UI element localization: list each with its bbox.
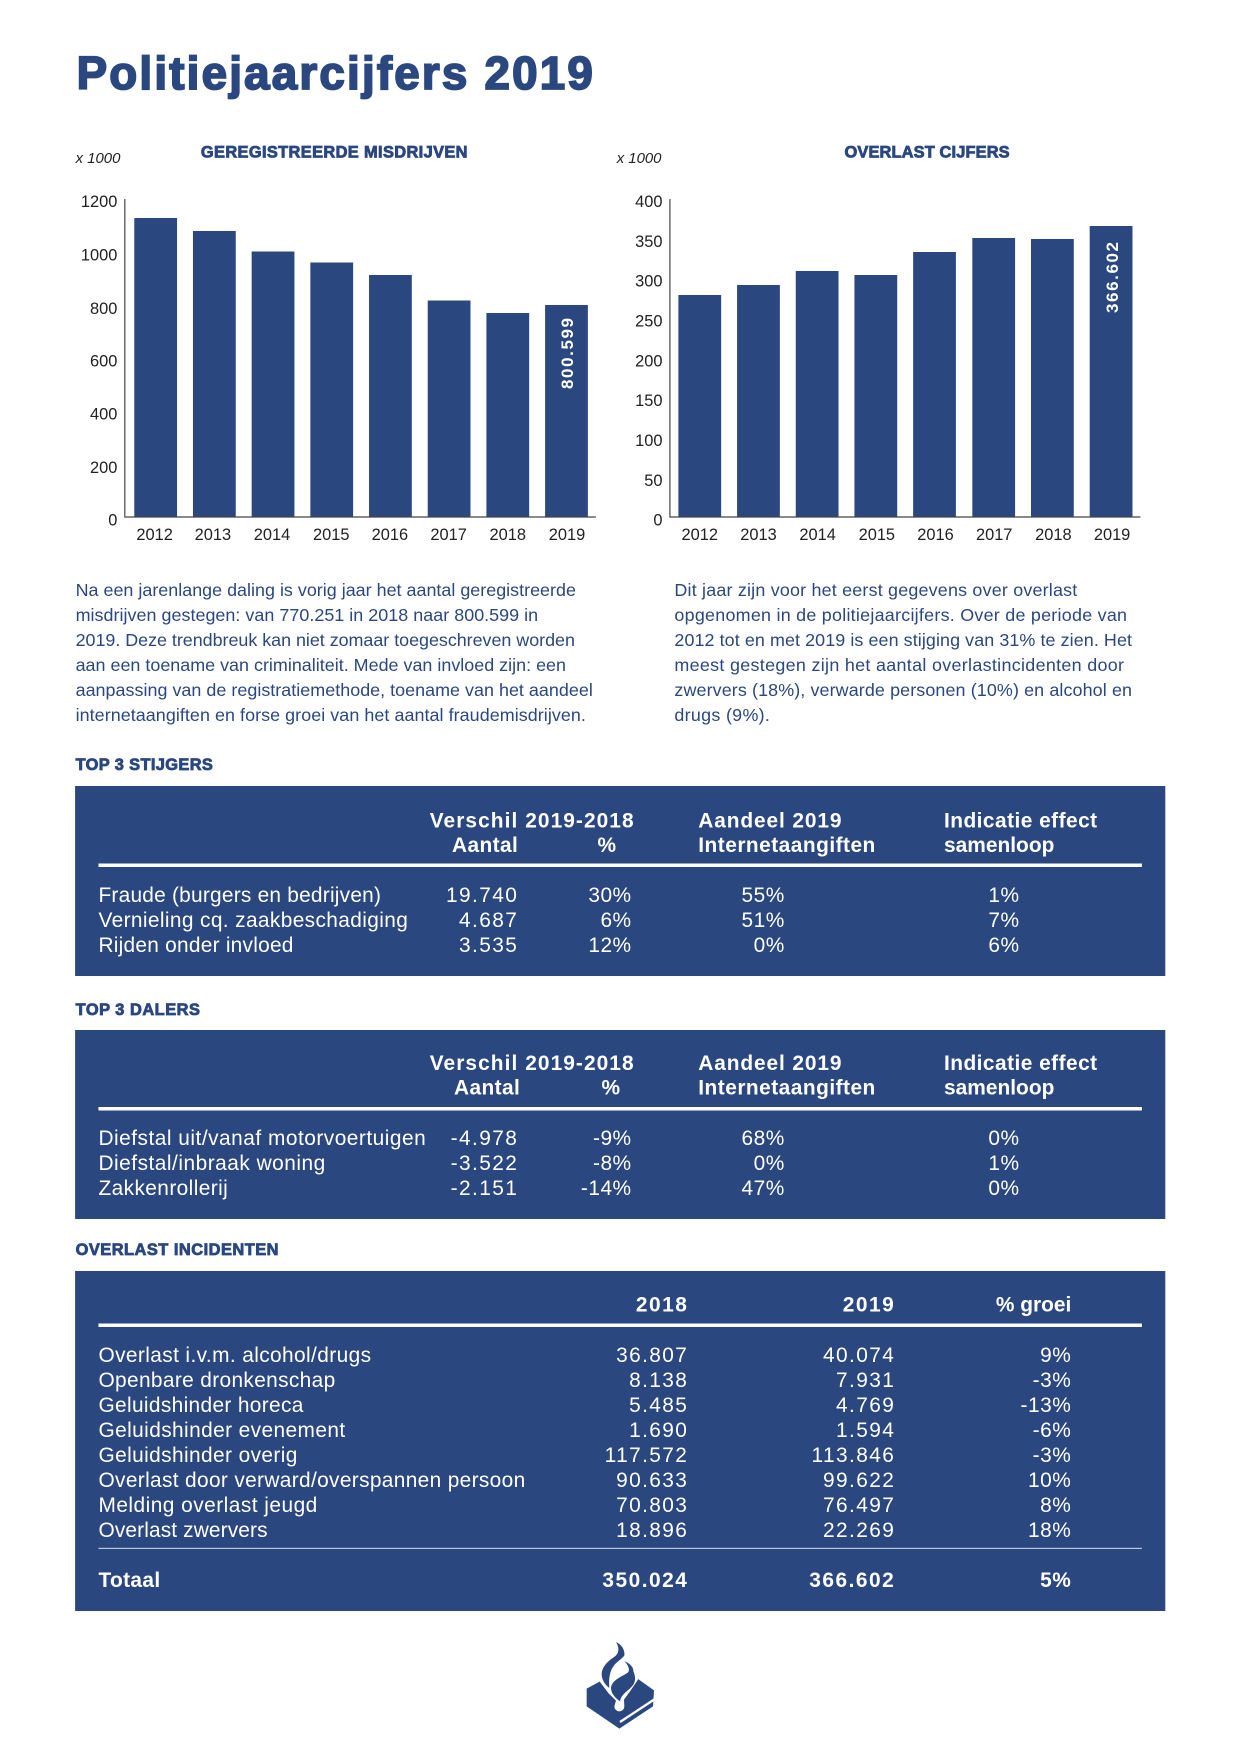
x axis labels: 2014 [254,526,290,544]
row: fraude [98,884,1020,907]
row: fraude: 30% [588,884,632,907]
y axis labels: 0 [653,511,662,530]
column headers: Indicatie effect [944,1052,1097,1075]
panel: top 3 stijgers [75,786,1165,976]
bars [134,218,588,517]
text block: overlast: Dit jaar zijn voor het eerst gegevens over overlast [674,580,1077,600]
column headers: Aantal [452,834,518,857]
row: zakkenrollerij [98,1177,1020,1200]
value label 2019: 800.599 [558,318,577,389]
axis lines [125,199,596,517]
row: overlast jeugd: 76.497 [823,1494,895,1517]
row: diefstal motorvoertuigen: 68% [742,1127,785,1150]
text block: misdrijven [76,580,593,725]
x axis labels: 2018 [1035,526,1072,544]
row: zakkenrollerij: 0% [988,1177,1020,1200]
row: vernieling [98,909,1020,932]
column headers: Aantal [454,1076,520,1100]
row: vernieling: 51% [742,909,785,932]
row: inbraak woning: -3.522 [451,1152,518,1175]
text block: overlast: zwervers (18%), verwarde personen (10%) en alcohol en [674,680,1132,700]
y axis labels [635,193,662,530]
row: geluidshinder horeca: 5.485 [629,1394,688,1417]
row: diefstal motorvoertuigen: -9% [593,1127,632,1150]
y axis labels: 1200 [81,193,117,211]
row: geluidshinder overig: Geluidshinder overig [98,1444,297,1467]
row: verward persoon: Overlast door verward/overspannen persoon [98,1469,525,1492]
column headers: 2019 [843,1293,895,1317]
column headers: Internetaangiften [698,834,875,857]
row: diefstal motorvoertuigen [98,1127,1020,1150]
row: geluidshinder overig [98,1444,1071,1467]
bars [678,226,1132,517]
row: overlast zwervers: 22.269 [823,1519,895,1542]
column headers: Aandeel 2019 [698,809,842,833]
row: openbare dronkenschap: 7.931 [836,1369,895,1392]
column headers: % [597,834,616,857]
row: fraude: 19.740 [446,884,518,907]
row: diefstal motorvoertuigen: -4.978 [451,1127,518,1150]
row: totaal: 366.602 [809,1569,895,1592]
column headers: % groei [996,1293,1071,1317]
heading: overlast incidenten: OVERLAST INCIDENTEN [76,1241,279,1259]
chart heading: OVERLAST CIJFERS [845,143,1010,162]
y axis labels: 0 [108,511,117,530]
row: geluidshinder overig: -3% [1033,1444,1071,1467]
row: totaal: Totaal [98,1569,160,1592]
x axis labels: 2019 [549,526,585,544]
row: fraude: Fraude (burgers en bedrijven) [98,884,381,907]
row: rijden onder invloed: 3.535 [459,934,518,957]
text block: overlast [674,580,1132,725]
row: verward persoon: 90.633 [616,1469,688,1492]
row: overlast jeugd [98,1494,1071,1517]
text block: misdrijven: Na een jarenlange daling is vorig jaar het aantal geregistreerde [76,580,576,600]
row: alcohol/drugs: 40.074 [823,1344,895,1367]
y axis labels: 800 [90,300,117,318]
panel: top 3 dalers [75,1030,1165,1219]
x axis labels: 2018 [490,526,526,544]
chart: geregistreerde misdrijven [75,143,596,544]
row: overlast zwervers: 18% [1028,1519,1071,1542]
row: geluidshinder overig: 113.846 [812,1444,895,1467]
x axis labels: 2014 [799,526,836,544]
row: openbare dronkenschap: Openbare dronkenschap [98,1369,335,1392]
row: vernieling: 6% [600,909,632,932]
row: rijden onder invloed [98,934,1020,957]
row: geluidshinder overig: 117.572 [605,1444,688,1467]
row: inbraak woning: -8% [593,1152,632,1175]
row: rijden onder invloed: 12% [588,934,632,957]
unit label: x 1000 [616,150,662,167]
column headers [430,1052,1097,1100]
text block: overlast: 2012 tot en met 2019 is een stijging van 31% te zien. Het [674,630,1132,650]
column headers: Aandeel 2019 [698,1052,842,1075]
row: verward persoon [98,1469,1071,1492]
chart: overlast cijfers [616,143,1140,544]
heading: top 3 stijgers: TOP 3 STIJGERS [76,756,213,774]
x axis labels: 2016 [917,526,954,544]
row: rijden onder invloed: Rijden onder invloed [98,934,293,957]
row: rijden onder invloed: 6% [988,934,1020,957]
row: overlast jeugd: 70.803 [616,1494,688,1517]
row: totaal: 5% [1040,1569,1071,1592]
y axis labels: 600 [90,352,117,371]
y axis labels: 50 [644,472,662,490]
row: diefstal motorvoertuigen: Diefstal uit/vanaf motorvoertuigen [98,1127,426,1150]
text block: overlast: opgenomen in de politiejaarcijfers. Over de periode van [674,605,1127,625]
row: totaal: 350.024 [602,1569,688,1592]
x axis labels [682,526,1130,544]
row: verward persoon: 10% [1028,1469,1071,1492]
icon: police logo [587,1642,654,1729]
y axis labels: 250 [635,312,662,331]
row: inbraak woning [98,1152,1020,1175]
column headers: 2018 [636,1293,688,1317]
unit label: x 1000 [75,150,121,167]
row: zakkenrollerij: Zakkenrollerij [98,1177,228,1200]
value label 2019: 366.602 [1103,242,1122,313]
column headers: Verschil 2019-2018 [430,809,634,833]
column headers: % [601,1076,620,1100]
row: geluidshinder horeca: 4.769 [836,1394,895,1417]
row: rijden onder invloed: 0% [754,934,785,957]
column headers [636,1293,1071,1317]
x axis labels: 2016 [372,526,408,544]
row: overlast jeugd: 8% [1040,1494,1071,1517]
row: fraude: 1% [988,884,1020,907]
column headers: samenloop [944,834,1054,857]
row: zakkenrollerij: -14% [581,1177,632,1200]
text block: misdrijven: aanpassing van de registratiemethode, toename van het aandeel [76,680,593,700]
y axis labels: 350 [635,233,662,251]
column headers: Verschil 2019-2018 [430,1052,634,1075]
row: geluidshinder evenement [98,1419,1071,1442]
x axis labels: 2012 [136,526,173,544]
text block: misdrijven: 2019. Deze trendbreuk kan niet zomaar toegeschreven worden [76,630,575,650]
x axis labels [136,526,585,544]
row: overlast zwervers: 18.896 [616,1519,688,1542]
x axis labels: 2013 [195,526,231,544]
row: geluidshinder horeca: -13% [1021,1394,1071,1417]
row: geluidshinder evenement: 1.690 [629,1419,688,1442]
y axis labels: 100 [635,432,662,450]
text block: overlast: drugs (9%). [674,705,770,725]
column headers: samenloop [944,1076,1054,1100]
row: geluidshinder evenement: Geluidshinder evenement [98,1419,345,1442]
text block: misdrijven: aan een toename van criminaliteit. Mede van invloed zijn: een [76,655,566,675]
row: alcohol/drugs: 36.807 [616,1344,688,1367]
y axis labels: 400 [90,405,117,424]
y axis labels: 200 [90,459,117,477]
row: geluidshinder evenement: -6% [1033,1419,1071,1442]
row: alcohol/drugs: Overlast i.v.m. alcohol/drugs [98,1344,371,1367]
row: inbraak woning: 1% [988,1152,1020,1175]
row: alcohol/drugs: 9% [1040,1344,1071,1367]
axis lines [670,199,1140,517]
y axis labels: 400 [635,193,662,211]
x axis labels: 2019 [1094,526,1130,544]
y axis labels [81,193,117,530]
row: diefstal motorvoertuigen: 0% [988,1127,1020,1150]
x axis labels: 2015 [313,526,349,544]
row: openbare dronkenschap [98,1369,1071,1392]
y axis labels: 200 [635,352,662,371]
row: geluidshinder horeca: Geluidshinder horeca [98,1394,304,1417]
heading: top 3 dalers: TOP 3 DALERS [76,1001,200,1019]
y axis labels: 1000 [81,246,117,265]
row: totaal [98,1569,1071,1592]
title: Politiejaarcijfers 2019 [77,47,593,99]
column headers: Internetaangiften [698,1076,875,1100]
panel: overlast incidenten [75,1271,1165,1611]
x axis labels: 2015 [859,526,895,544]
row: inbraak woning: Diefstal/inbraak woning [98,1152,325,1175]
column headers [430,809,1097,857]
column headers: Indicatie effect [944,809,1097,833]
row: overlast jeugd: Melding overlast jeugd [98,1494,317,1517]
row: overlast zwervers: Overlast zwervers [98,1519,268,1542]
y axis labels: 300 [635,272,662,291]
row: overlast zwervers [98,1519,1071,1542]
row: fraude: 55% [742,884,785,907]
x axis labels: 2012 [682,526,718,544]
chart heading: GEREGISTREERDE MISDRIJVEN [201,143,468,162]
row: inbraak woning: 0% [754,1152,785,1175]
row: zakkenrollerij: -2.151 [451,1177,518,1200]
row: vernieling: 7% [988,909,1020,932]
row: verward persoon: 99.622 [823,1469,895,1492]
text block: misdrijven: misdrijven gestegen: van 770.251 in 2018 naar 800.599 in [76,605,538,625]
text block: overlast: meest gestegen zijn het aantal overlastincidenten door [674,655,1124,675]
x axis labels: 2017 [430,526,467,544]
row: geluidshinder horeca [98,1394,1071,1417]
x axis labels: 2013 [740,526,777,544]
row: zakkenrollerij: 47% [742,1177,785,1200]
row: vernieling: 4.687 [459,909,518,932]
row: openbare dronkenschap: 8.138 [629,1369,688,1392]
row: alcohol/drugs [98,1344,1071,1367]
row: openbare dronkenschap: -3% [1033,1369,1071,1392]
y axis labels: 150 [635,392,662,410]
x axis labels: 2017 [976,526,1012,544]
row: geluidshinder evenement: 1.594 [836,1419,895,1442]
text block: misdrijven: internetaangiften en forse groei van het aantal fraudemisdrijven. [76,705,586,725]
row: vernieling: Vernieling cq. zaakbeschadiging [98,909,408,932]
